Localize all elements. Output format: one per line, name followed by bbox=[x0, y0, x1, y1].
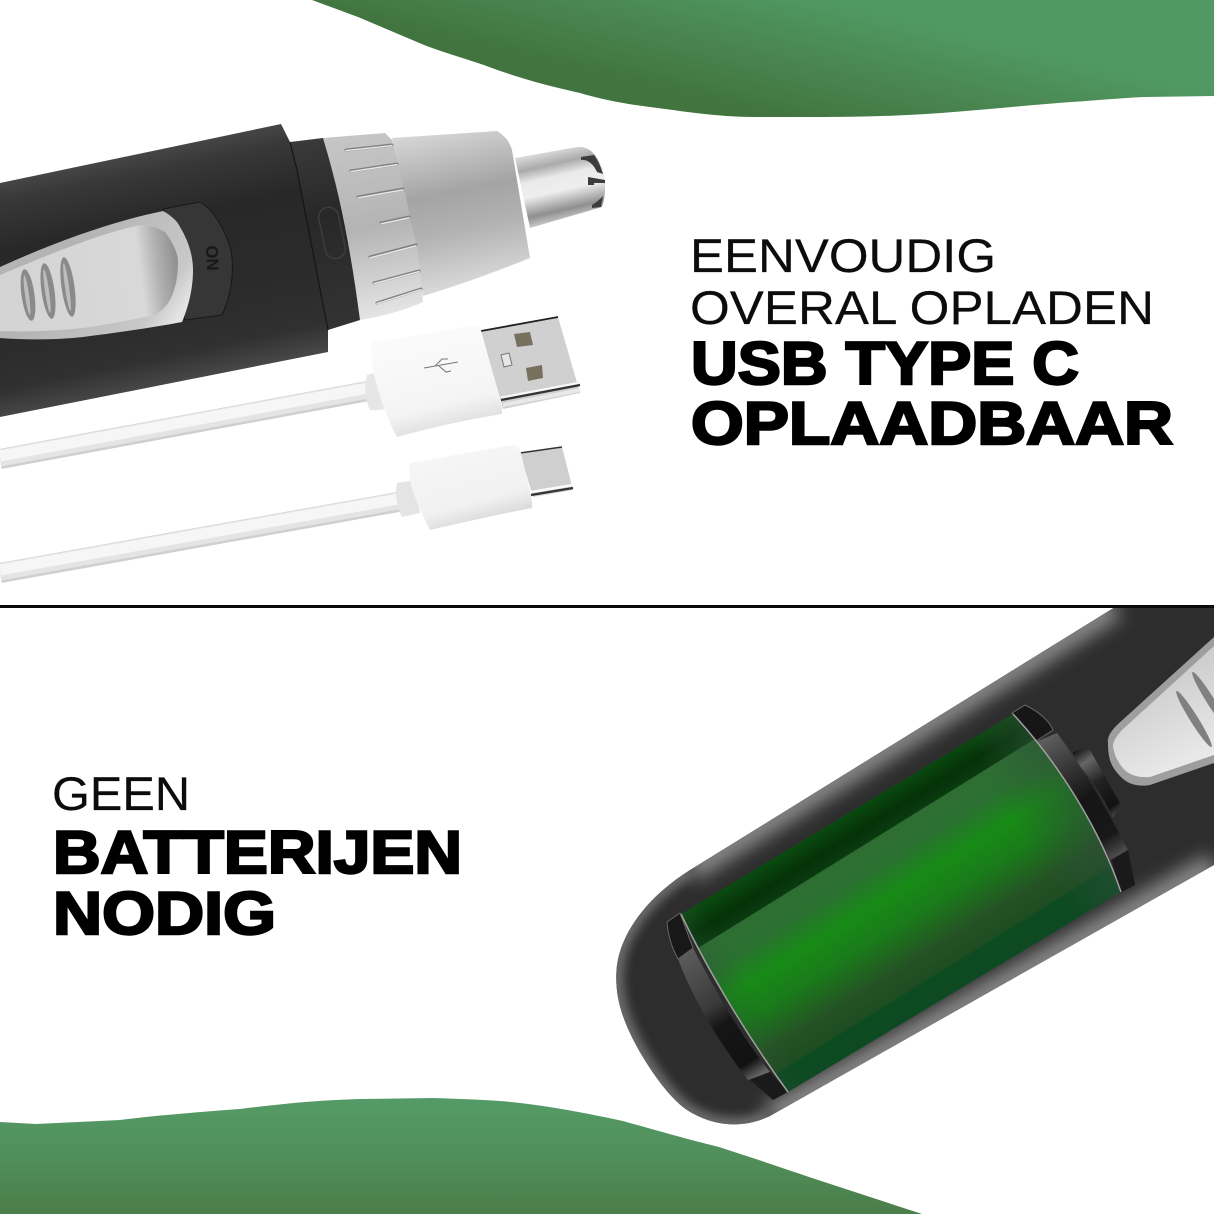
light line: GEEN bbox=[52, 767, 190, 820]
light lines bbox=[690, 229, 1154, 334]
bold lines: OPLAADBAAR bbox=[691, 390, 1173, 457]
base switch bbox=[1108, 637, 1214, 786]
trimmer nozzle bbox=[515, 147, 605, 228]
battery negative cap bbox=[667, 913, 788, 1100]
green wave: top right bbox=[312, 0, 1214, 117]
cap top corner bbox=[667, 913, 693, 959]
bold lines bbox=[53, 819, 462, 947]
light lines: OVERAL OPLADEN bbox=[690, 281, 1154, 334]
battery edge lines bbox=[681, 714, 1121, 1092]
silver cone bbox=[392, 131, 530, 296]
USB-C cable bbox=[0, 445, 573, 573]
USB-A housing with logo bbox=[371, 325, 502, 437]
product: nose trimmer head bbox=[0, 124, 605, 417]
trimmer body bbox=[0, 124, 328, 417]
heading: USB Type C bbox=[690, 229, 1173, 457]
heading: geen batterijen bbox=[52, 767, 462, 947]
USB-A cable bbox=[0, 317, 580, 459]
battery nipple bbox=[1073, 750, 1120, 818]
USB-C metal plug bbox=[520, 447, 573, 497]
battery cell bbox=[681, 714, 1121, 1092]
bold lines: BATTERIJEN bbox=[53, 819, 462, 886]
USB-A neck bbox=[365, 373, 392, 410]
trimmer base bbox=[600, 600, 1214, 1130]
cap bottom corner bbox=[750, 1072, 788, 1100]
green wave: bottom left bbox=[0, 1098, 922, 1214]
cap band bbox=[1033, 733, 1128, 860]
dark collar bbox=[290, 138, 360, 330]
panel divider bbox=[0, 605, 1214, 608]
USB-C housing bbox=[409, 445, 532, 530]
product: trimmer with battery cutaway bbox=[600, 600, 1214, 1130]
adjustment ring bbox=[323, 133, 423, 320]
cap bottom corner bbox=[1112, 850, 1135, 893]
switch surround with ON label: ON bbox=[202, 245, 222, 271]
bold lines: NODIG bbox=[53, 880, 276, 947]
bold lines bbox=[691, 330, 1173, 457]
USB-C cord bbox=[0, 499, 398, 573]
cap top corner bbox=[1012, 705, 1053, 743]
USB-A metal plug bbox=[481, 317, 580, 409]
switch surround with ON label bbox=[163, 202, 232, 320]
sliding switch bbox=[0, 211, 193, 339]
bold lines: USB TYPE C bbox=[691, 330, 1079, 397]
grip ridges bbox=[18, 256, 79, 322]
base switch ridges bbox=[1176, 672, 1214, 748]
cap band bbox=[678, 948, 770, 1080]
USB-C neck bbox=[396, 480, 420, 517]
light lines: EENVOUDIG bbox=[690, 229, 996, 282]
USB-A cord bbox=[0, 388, 368, 459]
battery positive cap bbox=[1012, 705, 1135, 893]
